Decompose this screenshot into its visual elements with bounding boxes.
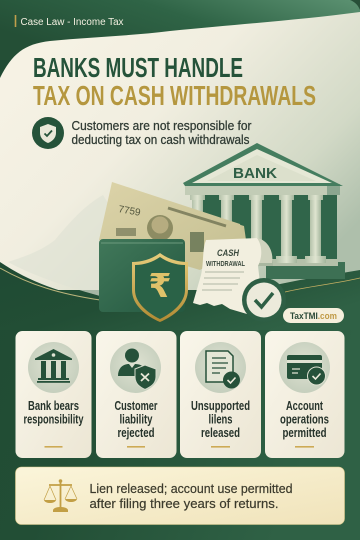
subtitle: deducting tax on cash withdrawals — [72, 133, 250, 147]
card: account operations permitted: operations — [280, 412, 329, 426]
card: unsupported liens released: released — [201, 426, 240, 440]
illustration: receipt: CASH — [217, 248, 240, 259]
card: account operations permitted: permitted — [282, 426, 326, 440]
callout: lien released — [16, 467, 344, 524]
card: bank bears responsibility: Bank bears — [28, 399, 79, 413]
card: account operations permitted: Account — [286, 399, 324, 413]
illustration: banknotes: 7759 — [117, 204, 142, 219]
title: BANKS MUST HANDLE — [33, 52, 243, 83]
subtitle — [72, 119, 252, 147]
callout: lien released: Lien released; account use permitted — [90, 481, 292, 496]
card: customer liability rejected: rejected — [118, 426, 154, 440]
illustration: receipt: WITHDRAWAL — [206, 261, 246, 268]
card: bank bears responsibility — [16, 331, 92, 458]
card: account operations permitted — [265, 331, 344, 458]
card: customer liability rejected: Customer — [114, 399, 158, 413]
illustration: wallet — [99, 239, 185, 312]
icon: scales of justice — [44, 479, 77, 512]
card: bank bears responsibility: responsibility — [24, 412, 84, 426]
icon: document with check — [195, 342, 246, 393]
icon: customer with x shield — [110, 342, 161, 393]
brand pill — [283, 308, 344, 323]
illustration: receipt — [193, 238, 272, 314]
callout: lien released: after filing three years of returns. — [90, 496, 278, 511]
subtitle: Customers are not responsible for — [72, 119, 252, 133]
illustration: rupee shield — [132, 253, 188, 322]
title — [33, 52, 316, 111]
illustration: banknotes — [99, 182, 246, 270]
brand pill: TaxTMI.com — [290, 311, 337, 322]
card: unsupported liens released: Unsupported — [191, 399, 250, 413]
card: unsupported liens released — [180, 331, 261, 458]
icon: shield check — [32, 117, 64, 149]
icon: check badge — [242, 278, 286, 322]
card: unsupported liens released: lilens — [208, 412, 233, 426]
card: customer liability rejected — [96, 331, 176, 458]
illustration: rupee shield: ₹ — [149, 266, 171, 305]
illustration: bank building: BANK — [233, 165, 277, 182]
icon: bank card with check — [279, 342, 330, 393]
tag: category label: Case Law - Income Tax — [20, 17, 124, 28]
illustration: bank building — [183, 143, 345, 279]
columns — [190, 195, 326, 263]
card: customer liability rejected: liability — [120, 412, 153, 426]
icon: bank — [28, 342, 79, 393]
